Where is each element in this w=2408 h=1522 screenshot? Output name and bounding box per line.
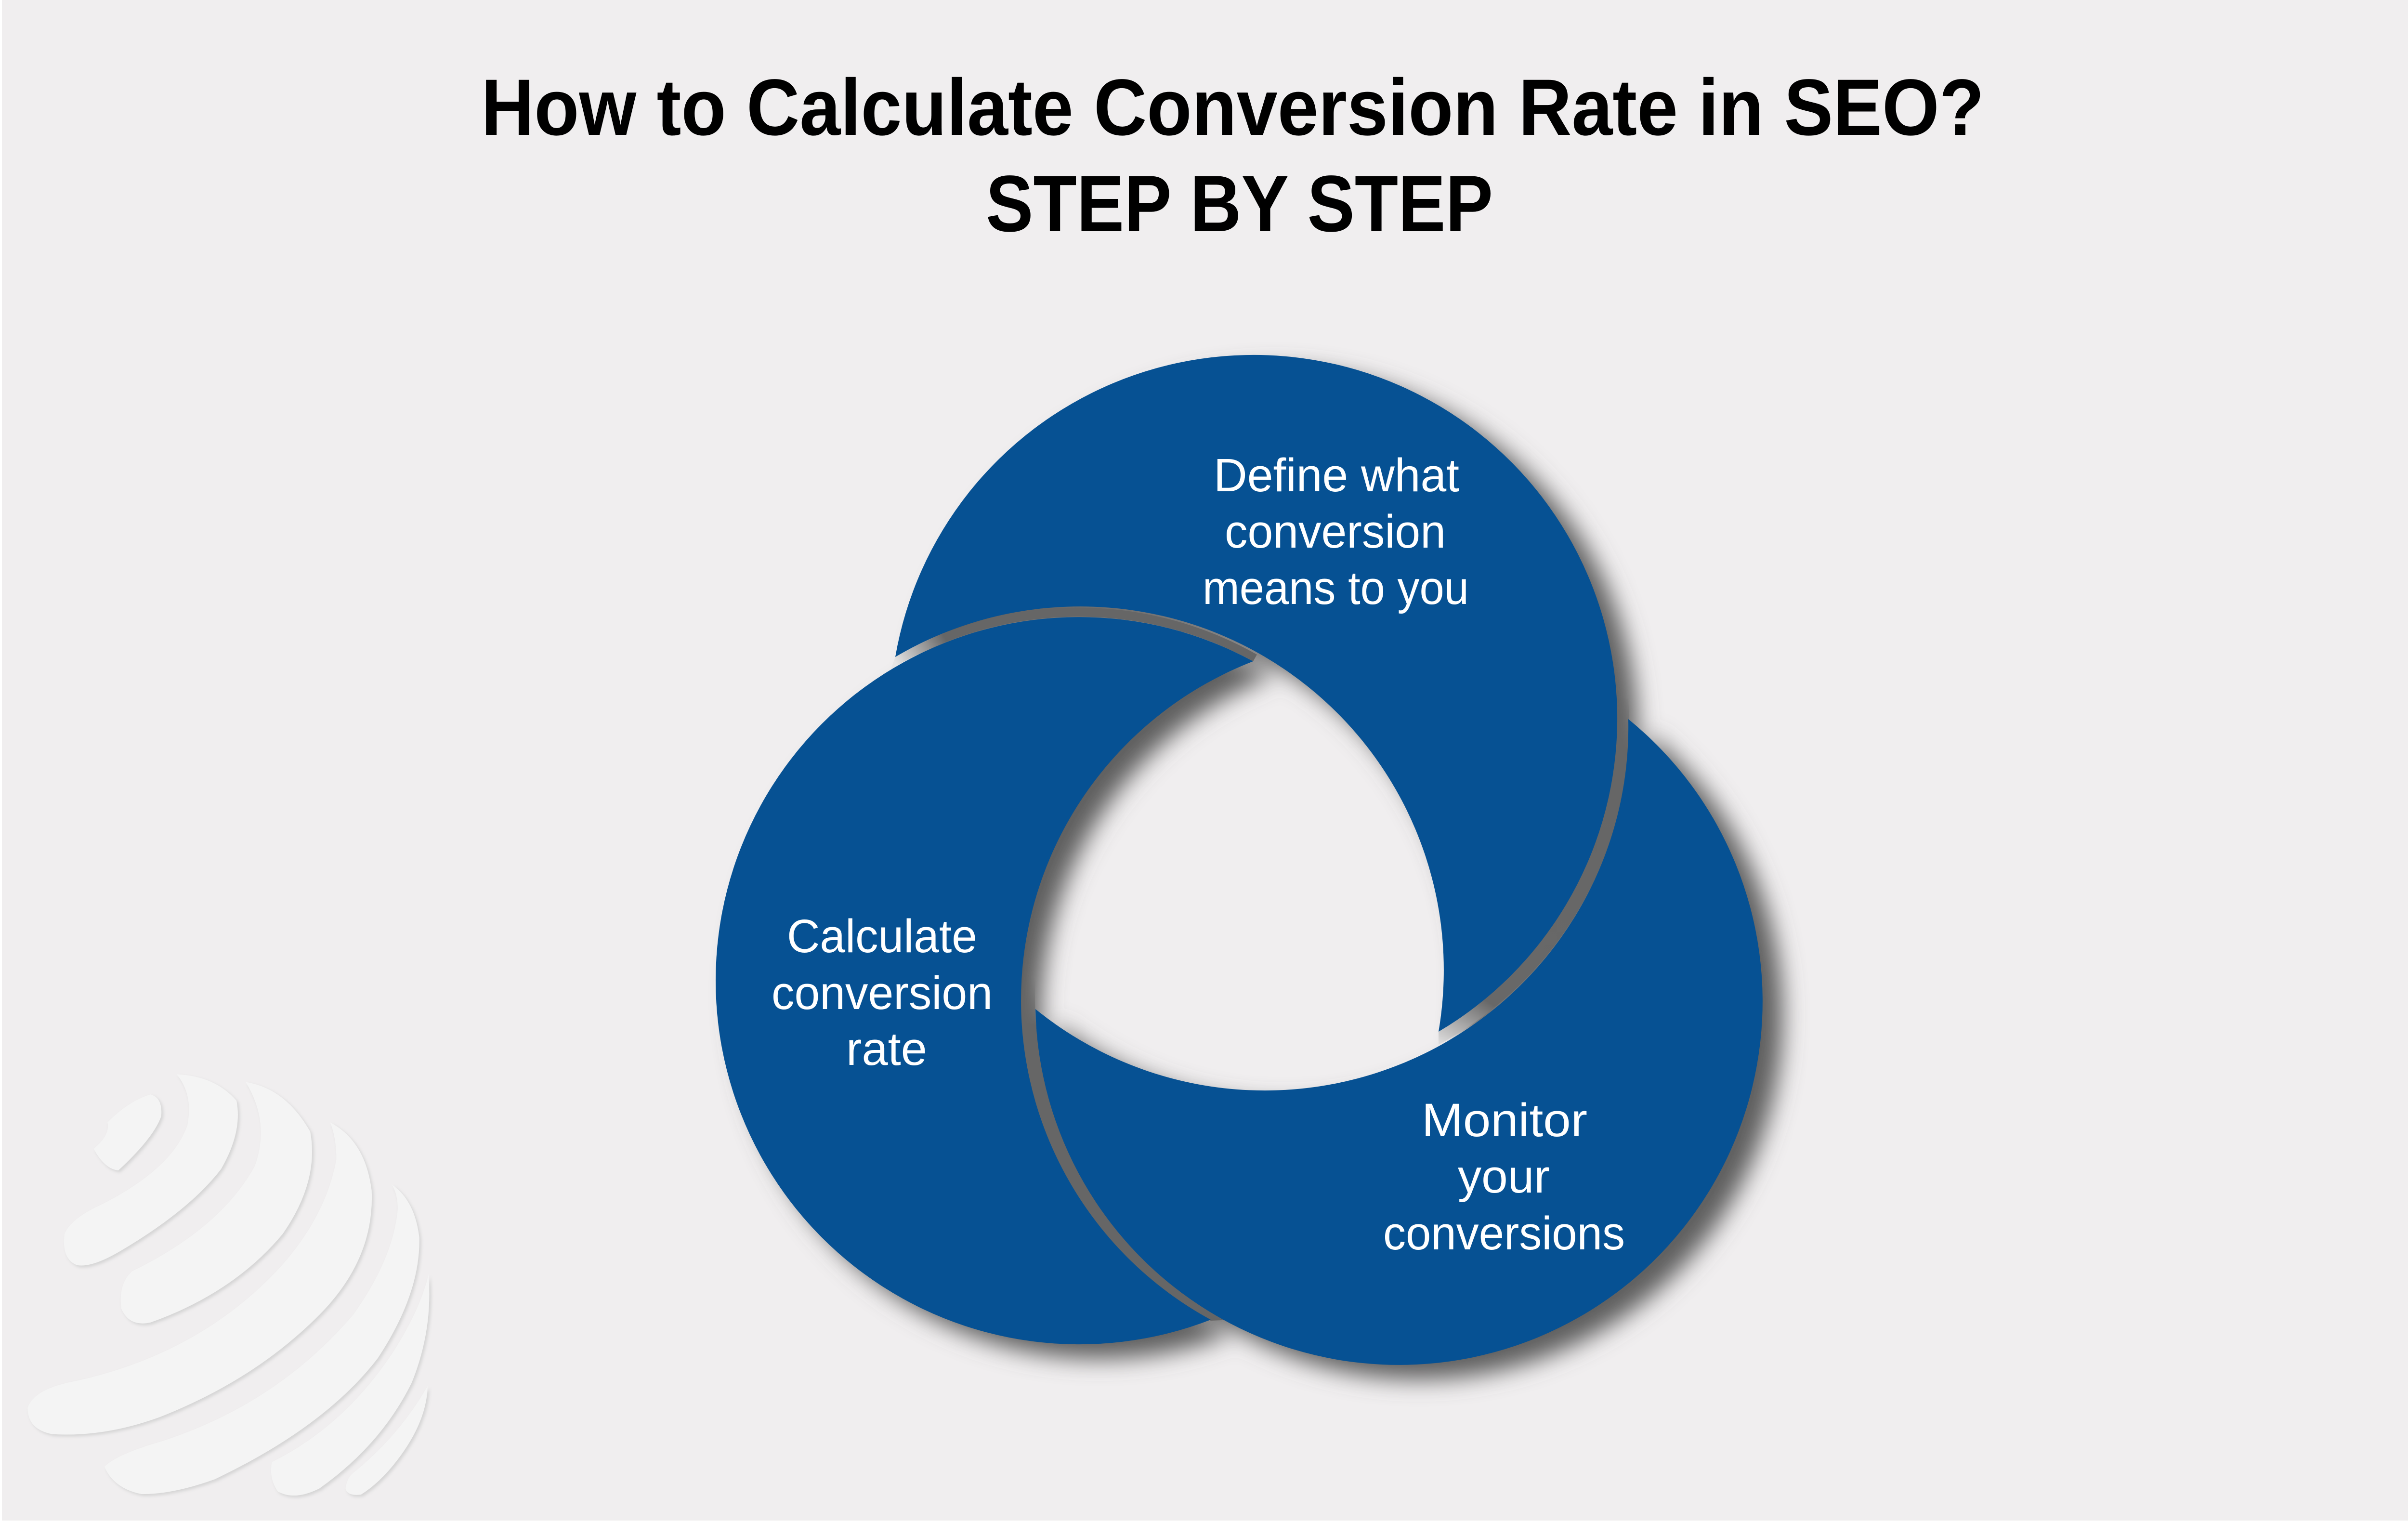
label: define: Define what (1214, 449, 1459, 501)
label: define: conversion (1225, 505, 1446, 558)
label: monitor (1383, 1094, 1625, 1260)
segment: monitor your conversions (1035, 719, 1763, 1365)
title: How to Calculate Conversion Rate in SEO? (481, 63, 1984, 152)
label: calculate: Calculate (787, 910, 977, 962)
title: STEP BY STEP (986, 159, 1493, 249)
label: monitor: your (1458, 1150, 1550, 1203)
label: define: means to you (1203, 562, 1469, 614)
grey band: left circle beside bottom circle (1020, 978, 1233, 1321)
label: monitor: Monitor (1422, 1094, 1587, 1146)
grey band: bottom circle beside top circle (1439, 698, 1629, 1045)
soft drop shadow of the three arcs (736, 369, 1783, 1379)
label: calculate: conversion (772, 967, 993, 1019)
title (481, 63, 1984, 249)
label: calculate (772, 910, 993, 1075)
grey band: top arc over left circle (891, 607, 1257, 669)
label: monitor: conversions (1383, 1207, 1625, 1260)
segment: calculate conversion rate (716, 617, 1253, 1344)
segment: define what conversion means to you (895, 355, 1617, 1032)
label: calculate: rate (846, 1023, 927, 1075)
label: define (1203, 449, 1469, 614)
watermark: globe logo (27, 1075, 429, 1496)
